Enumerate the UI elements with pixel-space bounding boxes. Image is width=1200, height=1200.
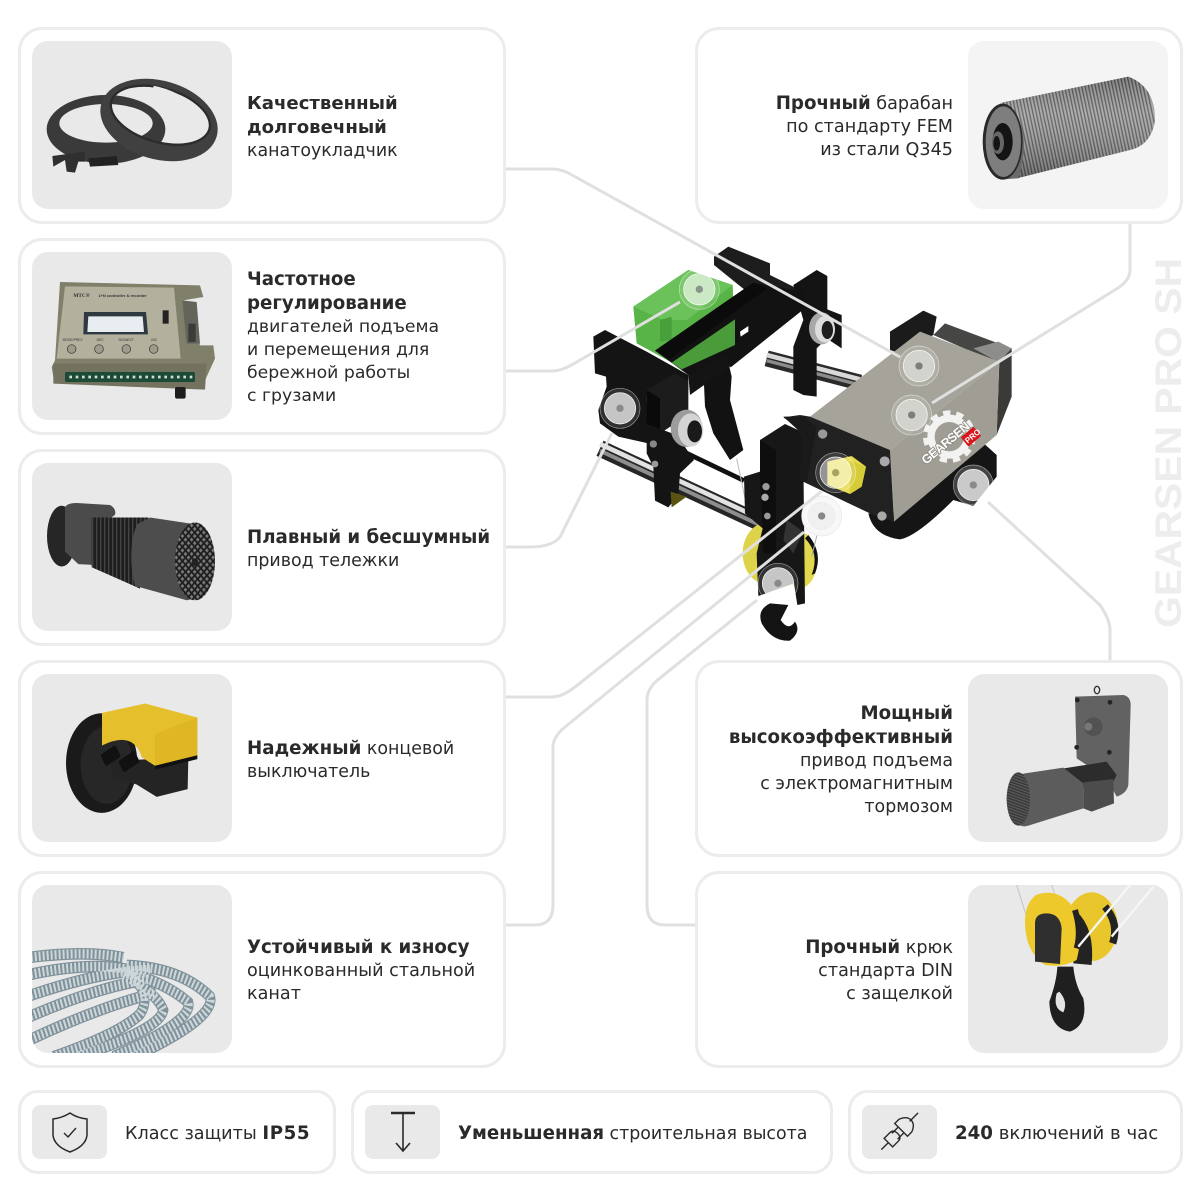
panel: hook xyxy=(695,871,1183,1068)
text: rope guide: долговечный xyxy=(247,117,387,138)
text: drum: из стали Q345 xyxy=(820,140,953,160)
image: trolley motor xyxy=(32,463,232,631)
text: rope guide: канатоукладчик xyxy=(247,141,398,161)
panel: building height xyxy=(351,1090,833,1174)
logo GEARSEN PRO: GEARSEN xyxy=(919,419,973,467)
icon: plug xyxy=(862,1105,937,1159)
panel: trolley drive xyxy=(18,449,506,646)
text: frequency control: с грузами xyxy=(247,386,336,406)
image: controller xyxy=(32,252,232,420)
panel: rope guide xyxy=(18,27,506,224)
image: controller: INC xyxy=(151,338,158,342)
text: protection class: Класс защиты IP55 xyxy=(125,1123,310,1144)
text: steel rope xyxy=(247,937,475,1004)
text: trolley drive xyxy=(247,527,490,571)
text: rope guide xyxy=(247,93,398,161)
text: limit switch: выключатель xyxy=(247,762,370,782)
icon: shield xyxy=(32,1105,107,1159)
text: rope guide: Качественный xyxy=(247,93,398,114)
green control box xyxy=(633,270,735,363)
text: hoist drive xyxy=(729,703,953,817)
rear right upright xyxy=(793,270,842,397)
text: hoist drive: Мощный xyxy=(861,703,953,724)
image: hoist motor xyxy=(968,674,1168,842)
front trolley wheel xyxy=(671,410,703,447)
text: hoist drive: тормозом xyxy=(864,797,953,817)
text: trolley drive: привод тележки xyxy=(247,551,399,571)
image: rope guide rings xyxy=(32,41,232,209)
text: hoist drive: высокоэффективный xyxy=(729,727,953,748)
text: hoist drive: привод подъема xyxy=(800,751,953,771)
icon: height arrow xyxy=(365,1105,440,1159)
panel: hoist drive xyxy=(695,660,1183,857)
image: drum xyxy=(968,41,1168,209)
hoist body xyxy=(783,323,1012,522)
text: drum: Прочный барабан xyxy=(776,93,953,114)
rear body bracket xyxy=(890,311,937,353)
marker circles xyxy=(600,269,993,603)
text: steel rope: канат xyxy=(247,984,301,1004)
text: trolley drive: Плавный и бесшумный xyxy=(247,527,490,548)
panel: frequency control xyxy=(18,238,506,435)
text: frequency control: Частотное xyxy=(247,269,356,290)
rear bracket xyxy=(714,247,805,307)
hoist machine xyxy=(593,247,1012,641)
panel: switching rate xyxy=(848,1090,1183,1174)
limit switch yellow box xyxy=(827,456,866,494)
left side plate xyxy=(593,330,688,443)
text: drum xyxy=(776,93,953,160)
text: drum: по стандарту FEM xyxy=(786,117,953,137)
text: frequency control: и перемещения для xyxy=(247,340,429,360)
image: controller: 1+N controller & recorder xyxy=(98,293,147,298)
text: hook: с защелкой xyxy=(846,984,953,1004)
text: building height: Уменьшенная строительная высота xyxy=(458,1123,807,1144)
text: limit switch: Надежный концевой xyxy=(247,738,454,759)
logo GEARSEN PRO: PRO xyxy=(963,427,982,445)
text: hoist drive: с электромагнитным xyxy=(760,774,953,794)
hook xyxy=(760,603,797,641)
text: hook: Прочный крюк xyxy=(805,937,953,958)
image: controller: MODE/PREV xyxy=(63,338,83,342)
text: frequency control: регулирование xyxy=(247,293,407,314)
yellow sheaves xyxy=(743,523,818,588)
rear rod xyxy=(767,355,860,385)
image: limit switch xyxy=(32,674,232,842)
text: hook: стандарта DIN xyxy=(818,961,953,981)
panel: steel rope xyxy=(18,871,506,1068)
image: hook block xyxy=(968,885,1168,1053)
drum under body xyxy=(868,440,997,539)
right tower xyxy=(744,417,817,605)
text: hook xyxy=(805,937,953,1004)
text: frequency control xyxy=(247,269,439,406)
text: steel rope: Устойчивый к износу xyxy=(247,937,470,958)
image: controller: MTC® xyxy=(73,292,90,299)
front tower xyxy=(647,355,730,507)
rear trolley wheel xyxy=(809,312,835,344)
frame beams xyxy=(655,283,806,383)
panel: drum xyxy=(695,27,1183,224)
text: steel rope: оцинкованный стальной xyxy=(247,961,475,981)
image: steel rope coil xyxy=(32,885,232,1053)
panel: limit switch xyxy=(18,660,506,857)
vertical watermark: GEARSEN PRO SH: GEARSEN PRO SH xyxy=(1148,258,1189,628)
text: switching rate: 240 включений в час xyxy=(955,1123,1158,1144)
image: controller: SIG/NEXT xyxy=(118,338,134,342)
center arm xyxy=(703,355,743,460)
connector lines xyxy=(505,169,1130,925)
text: limit switch xyxy=(247,738,454,782)
text: frequency control: бережной работы xyxy=(247,363,410,383)
text: frequency control: двигателей подъема xyxy=(247,317,439,337)
panel: protection class xyxy=(18,1090,336,1174)
front rod xyxy=(600,444,763,526)
image: controller: DEC xyxy=(97,338,104,342)
